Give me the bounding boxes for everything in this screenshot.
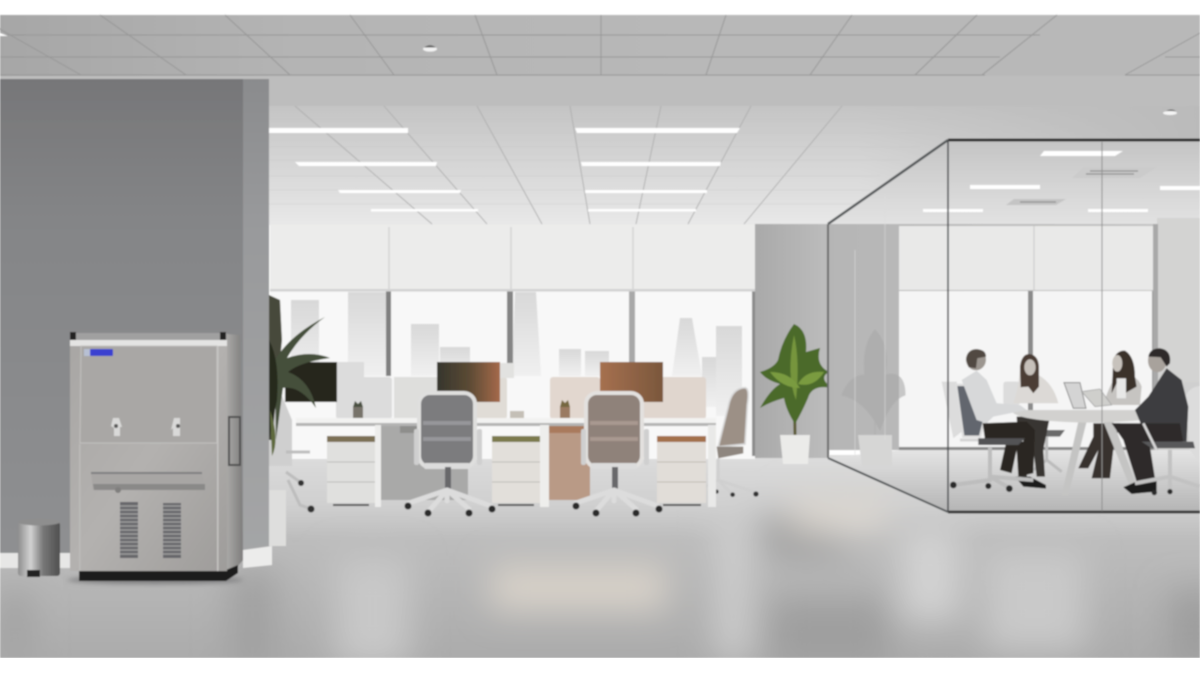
waste bin [18,518,60,577]
water cooler [70,332,243,581]
laptop and papers [1064,383,1112,408]
seated man right [1112,348,1200,495]
potted plant by pillar [760,324,832,464]
meeting room people and furniture [942,348,1200,495]
window blinds [270,225,755,292]
side handle [229,417,240,465]
pedestal drawers [327,436,706,505]
pillar [755,224,828,458]
plant and chair at left edge of workspace [269,295,330,546]
bulkhead beam across ceiling [0,76,1200,108]
recessed dispensing panel [80,346,217,443]
table [1013,410,1168,495]
taps [111,418,180,436]
shadow of cooler on floor [67,576,243,584]
task chair right [572,393,662,516]
woman on right [1078,351,1142,478]
recessed ceiling with grid [269,106,1200,225]
task chair left [404,393,496,516]
workstation: under-desk panels [381,425,598,500]
drip tray [91,472,205,493]
glass partition frame [828,140,1200,512]
blue brand label [84,349,113,356]
ventilation grilles [120,502,181,558]
woman in centre [1013,354,1058,477]
ceiling lights row [269,128,740,212]
workstation: desk top and legs [296,418,716,507]
cooler front body [70,342,227,571]
floor [0,455,1200,670]
back window with skyline [270,291,756,459]
seated man left [942,349,1046,492]
cooler feet [79,565,238,581]
rear office chair [698,388,759,497]
upper ceiling with tile grid [0,15,1200,77]
workstation: monitors and privacy panels [285,362,706,419]
bottom white band [0,658,1200,675]
left wall block [0,79,272,568]
cooler side panel [227,334,243,572]
background chair [1003,382,1200,472]
cooler top cap [70,332,227,346]
meeting room interior [828,140,1200,512]
